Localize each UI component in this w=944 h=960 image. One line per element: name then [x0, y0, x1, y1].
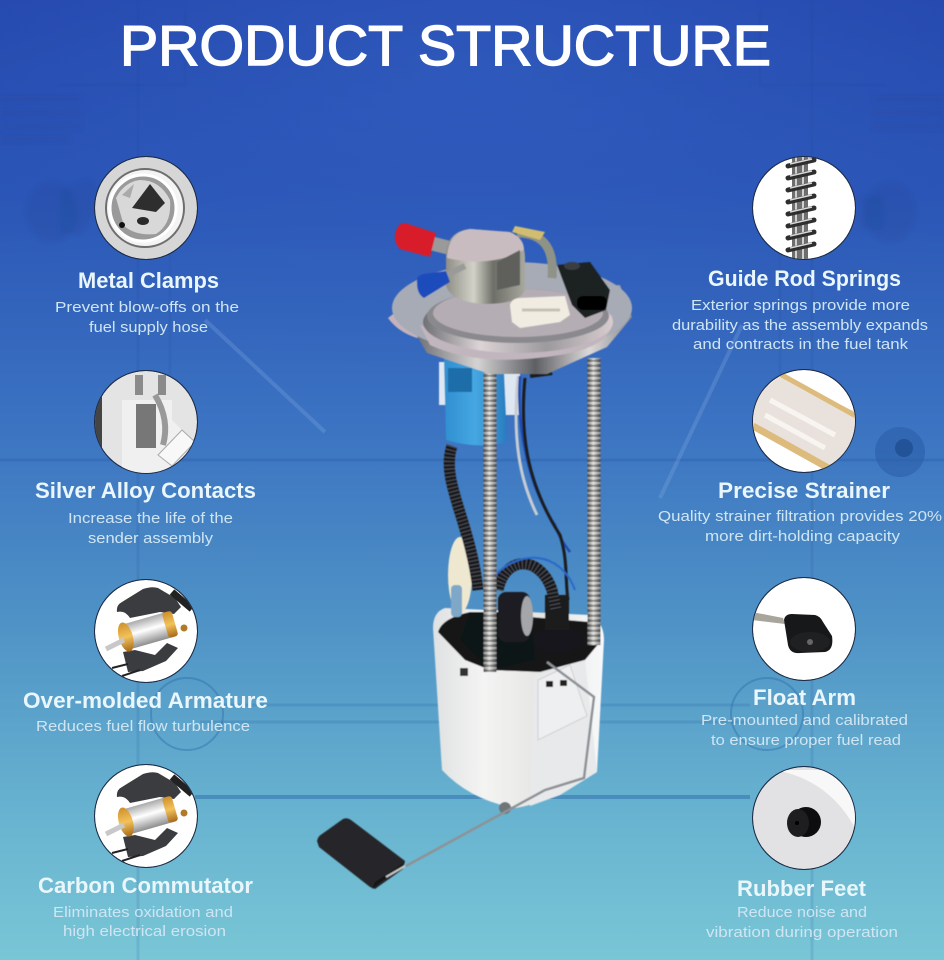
- feature: float arm: [701, 577, 908, 749]
- title: PRODUCT STRUCTURE: [120, 14, 771, 78]
- description: [701, 712, 908, 749]
- description: Reduces fuel flow turbulence: [36, 718, 250, 735]
- icon: commutator: [94, 764, 198, 868]
- description: [672, 297, 928, 353]
- product photo: fuel pump assembly: [317, 223, 632, 889]
- icon: float: [752, 577, 856, 681]
- description: to ensure proper fuel read: [711, 732, 901, 749]
- description: Eliminates oxidation and: [53, 904, 233, 921]
- description: vibration during operation: [706, 924, 898, 941]
- feature: over-molded armature: [23, 579, 268, 735]
- icon: contacts: [94, 370, 198, 480]
- description: fuel supply hose: [89, 319, 208, 336]
- description: more dirt-holding capacity: [705, 528, 901, 545]
- wires: [495, 372, 575, 600]
- heading: Carbon Commutator: [38, 873, 253, 898]
- pump motor and internal parts: [448, 537, 581, 670]
- description: durability as the assembly expands: [672, 317, 928, 334]
- description: Reduce noise and: [737, 904, 867, 921]
- feature: metal clamps: [55, 156, 239, 336]
- description: [706, 904, 898, 941]
- description: [658, 508, 942, 545]
- icon: metal clamp: [94, 156, 198, 260]
- heading: Metal Clamps: [78, 268, 219, 293]
- heading: Silver Alloy Contacts: [35, 478, 256, 503]
- heading: Rubber Feet: [737, 876, 867, 901]
- electrical connectors: [510, 262, 610, 328]
- icon: rubber foot: [752, 766, 856, 870]
- icon: armature: [94, 579, 198, 683]
- fuel regulator with caps: [395, 223, 552, 304]
- description: [53, 904, 233, 940]
- blue canister: [439, 358, 520, 446]
- description: and contracts in the fuel tank: [693, 336, 909, 353]
- fuel cup: [433, 608, 604, 814]
- description: Exterior springs provide more: [691, 297, 910, 314]
- description: high electrical erosion: [63, 923, 226, 940]
- guide rod springs: [484, 358, 600, 672]
- feature: carbon commutator: [38, 764, 253, 940]
- flange and dome: [388, 262, 632, 374]
- icon: spring: [752, 156, 856, 260]
- description: [68, 510, 233, 547]
- description: [55, 299, 239, 336]
- description: Quality strainer filtration provides 20%: [658, 508, 942, 525]
- heading: Float Arm: [753, 685, 856, 710]
- feature: silver alloy contacts: [35, 370, 256, 547]
- float arm and float: [317, 662, 594, 889]
- heading: Over-molded Armature: [23, 688, 268, 713]
- heading: Precise Strainer: [718, 478, 890, 503]
- feature: precise strainer: [658, 369, 942, 545]
- icon: strainer: [752, 369, 860, 473]
- description: Pre-mounted and calibrated: [701, 712, 908, 729]
- feature: rubber feet: [706, 766, 898, 941]
- corrugated hoses: [449, 446, 556, 610]
- description: Prevent blow-offs on the: [55, 299, 239, 316]
- description: Increase the life of the: [68, 510, 233, 527]
- description: sender assembly: [88, 530, 214, 547]
- heading: Guide Rod Springs: [708, 266, 901, 291]
- feature: guide rod springs: [672, 156, 928, 353]
